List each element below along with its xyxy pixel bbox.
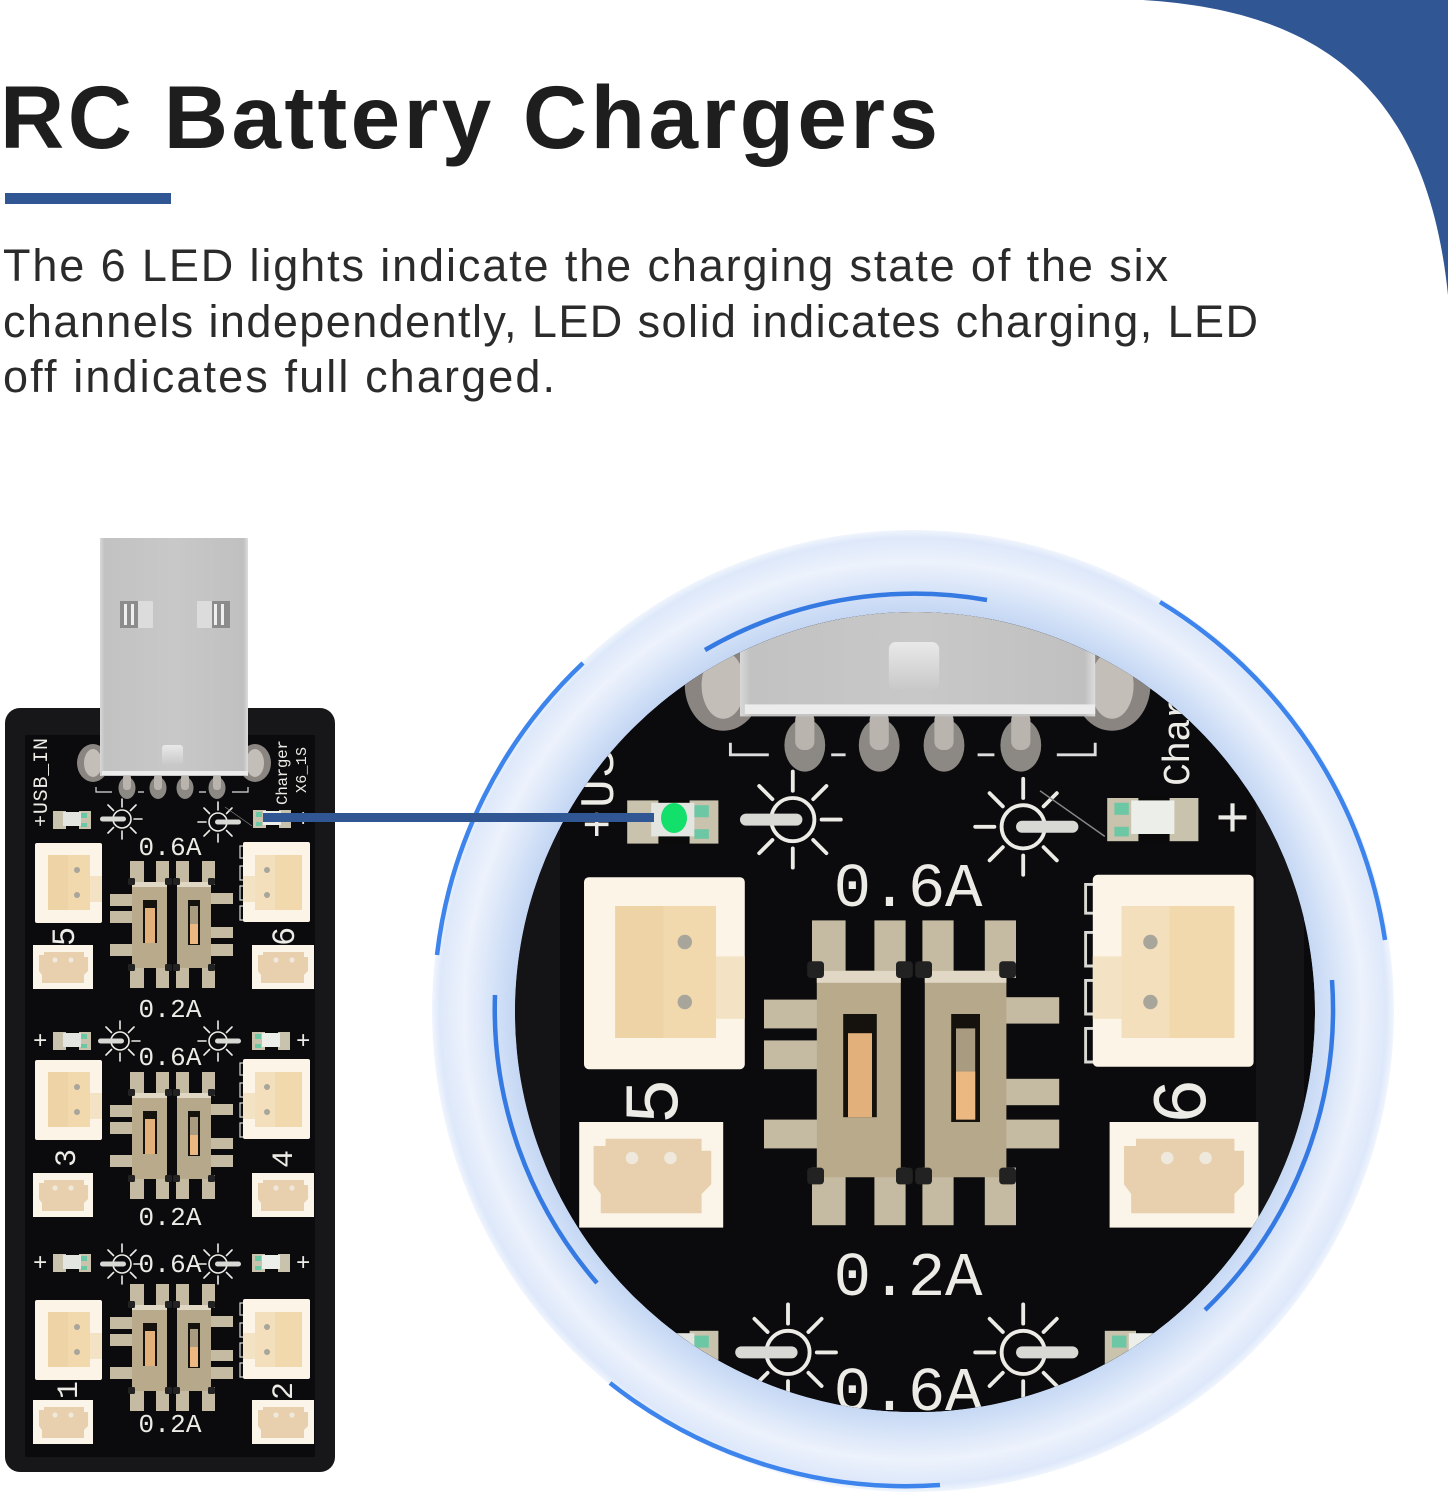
title underline [5, 193, 171, 204]
magnified board: 0.6A [834, 854, 983, 925]
magnified board: +USB_IN [574, 625, 628, 839]
usb plug [77, 538, 271, 799]
board silkscreen labels: 1 [53, 1381, 87, 1399]
board silkscreen labels: + [296, 1029, 310, 1056]
board silkscreen labels: 6 [267, 927, 304, 946]
magnified board: 0.6A [834, 1358, 983, 1429]
channel group 1 and 2 [33, 1244, 314, 1444]
magnified board: 6 [1143, 1078, 1230, 1124]
arrow: connector line from board led to magnified led [263, 813, 654, 822]
magnified board: 5 [615, 1078, 702, 1124]
board silkscreen labels: + [33, 1251, 47, 1278]
board silkscreen labels: 0.2A [138, 995, 202, 1025]
board silkscreen labels: 5 [47, 927, 84, 946]
board silkscreen labels: + [296, 1251, 310, 1278]
board silkscreen labels: 0.2A [138, 1203, 202, 1233]
magnified board: Charger [1157, 630, 1201, 786]
board silkscreen labels: 0.6A [138, 833, 202, 863]
board body [5, 708, 335, 1472]
board silkscreen labels: + [33, 1029, 47, 1056]
board silkscreen labels: 2 [268, 1382, 302, 1400]
board silkscreen labels: 4 [268, 1150, 302, 1168]
magnified board: + [1215, 789, 1250, 854]
magnified board: 0.2A [834, 1243, 983, 1314]
board silkscreen labels: X6_1S [294, 747, 311, 793]
corner accent [1143, 0, 1448, 295]
board silkscreen labels: +USB_IN [31, 738, 54, 827]
board silkscreen labels: 0.2A [138, 1410, 202, 1440]
description text: off indicates full charged. [3, 351, 555, 402]
channel group 5 and 6 [33, 799, 314, 989]
board silkscreen labels: + [296, 807, 310, 834]
title: RC Battery Chargers [0, 67, 938, 167]
outer ring arcs [437, 602, 1385, 1486]
board silkscreen labels: 0.6A [138, 1250, 202, 1280]
channel group 3 and 4 [33, 1021, 314, 1217]
magnified board [515, 612, 1315, 1412]
board silkscreen labels: 3 [51, 1149, 85, 1167]
description text: channels independently, LED solid indicates charging, LED [3, 296, 1258, 347]
pcb surface [25, 735, 315, 1457]
board silkscreen labels: 0.6A [138, 1043, 202, 1073]
panel: magnified LED view [432, 530, 1394, 1492]
description text [3, 240, 1258, 402]
inner ring arcs [495, 594, 1333, 1310]
description text: The 6 LED lights indicate the charging state of the six [3, 240, 1168, 291]
board silkscreen labels [31, 738, 311, 1440]
lens ring [432, 530, 1394, 1492]
panel: full charger board [5, 538, 335, 1472]
lit green led [661, 803, 687, 833]
board silkscreen labels: Charger [274, 740, 292, 805]
